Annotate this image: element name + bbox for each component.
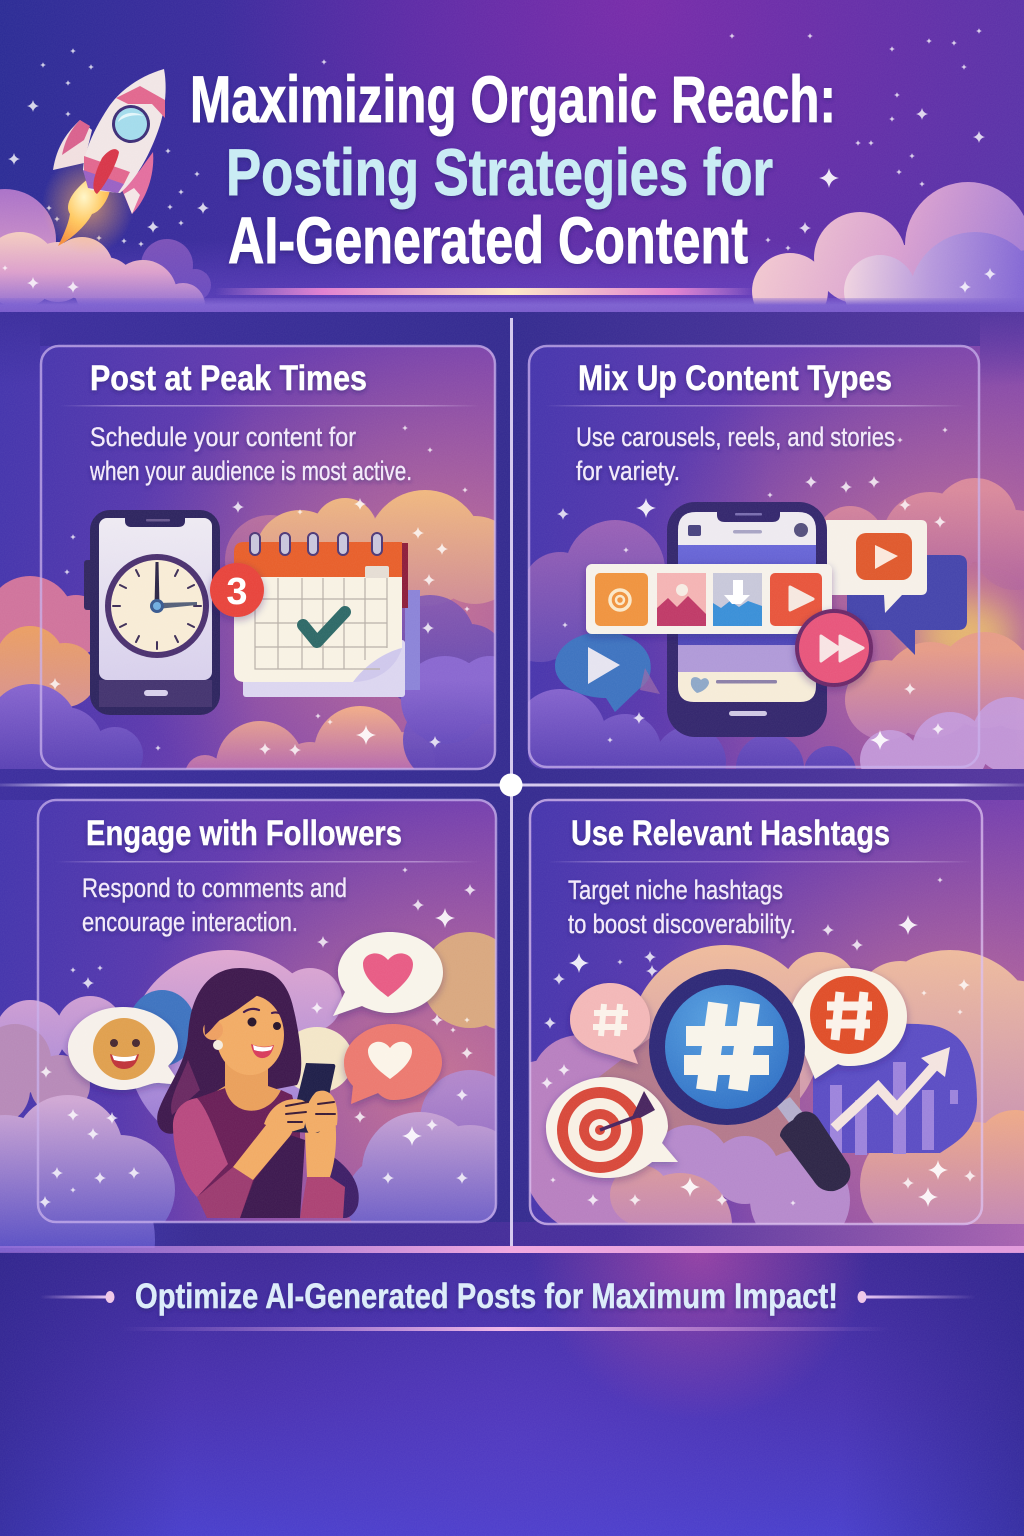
panel 1 stars	[49, 425, 470, 756]
icon: smile bubble	[68, 1007, 181, 1090]
header base strip	[0, 298, 1024, 312]
title	[190, 62, 836, 277]
icon: pink hashtag bubble	[570, 983, 650, 1064]
panel 1 body text: when your audience is most active.	[89, 456, 412, 486]
panel 3 body text: Respond to comments and	[82, 873, 347, 903]
tile: ocean	[713, 573, 762, 626]
panel 4 heading: Use Relevant Hashtags	[571, 814, 890, 853]
calendar rings	[250, 533, 382, 555]
neck and chest	[215, 1060, 285, 1114]
rocket	[42, 69, 166, 255]
face	[216, 995, 284, 1075]
panel 1 body text: Schedule your content for	[90, 422, 356, 452]
center divider cross	[0, 318, 1024, 1250]
header banner	[0, 0, 1024, 312]
fast-forward button	[795, 609, 873, 687]
panel 2 background	[528, 328, 1024, 769]
panel 3 background	[0, 800, 496, 1222]
panel 2 divider	[545, 405, 965, 406]
tile: video	[770, 573, 822, 626]
footer band	[0, 1246, 1024, 1536]
icon: growth chart	[813, 1024, 977, 1155]
icon: blue bubble behind	[128, 990, 196, 1066]
panel 2 stars	[557, 427, 950, 750]
icon: blue speech bubble behind	[847, 555, 967, 655]
panel 3 body text	[82, 873, 347, 937]
panel: engage with followers	[0, 798, 498, 1248]
carousel strip	[586, 564, 832, 634]
sweater	[185, 1088, 300, 1218]
panel 1 body text	[89, 422, 412, 486]
left forearm	[233, 1118, 300, 1180]
panel 3 body text: encourage interaction.	[82, 907, 298, 937]
title: AI-Generated Content	[228, 203, 748, 277]
footer right ornament	[858, 1291, 976, 1303]
fringe	[205, 970, 296, 1035]
icon: woman using phone	[157, 968, 359, 1218]
panel 4 stars	[541, 877, 976, 1207]
left clouds	[0, 189, 211, 304]
header glow line	[215, 288, 755, 295]
panel 3 frame	[38, 800, 496, 1222]
icon: coral heart bubble	[344, 1024, 442, 1104]
panel 2 body text	[576, 422, 895, 486]
trend arrow	[834, 1062, 938, 1128]
icon: red hashtag bubble	[790, 968, 907, 1079]
icon: play speech bubble	[826, 520, 927, 613]
rocket fins	[53, 120, 153, 214]
panel 3 divider	[55, 861, 480, 862]
panel 1 divider	[60, 405, 480, 406]
panel 3 heading: Engage with Followers	[86, 814, 402, 853]
hair	[157, 968, 301, 1134]
tile: photo	[657, 573, 706, 626]
phone in hands	[290, 1063, 335, 1133]
panel 4 background	[530, 800, 1024, 1224]
icon: target bubble	[546, 1077, 678, 1178]
panel 3 stars	[39, 867, 476, 1208]
title: Posting Strategies for	[226, 135, 773, 209]
icon: magnifying glass	[649, 969, 850, 1191]
panel 4 body text: to boost discoverability.	[568, 909, 796, 939]
tile: mention	[595, 573, 648, 626]
rocket body	[83, 69, 166, 193]
right clouds	[752, 182, 1024, 304]
icon: calendar	[234, 533, 420, 697]
icon: smartphone feed	[667, 502, 827, 737]
panel 1 heading: Post at Peak Times	[90, 359, 367, 398]
bottom-left cloud overflow	[0, 1222, 155, 1248]
dart	[600, 1091, 655, 1130]
eyes and brows	[244, 1009, 283, 1030]
icon: cream bubble behind	[281, 1027, 353, 1093]
panel 2 frame	[529, 346, 979, 767]
right sleeve	[300, 1177, 345, 1218]
panel 1 background	[0, 346, 495, 769]
rocket porthole	[112, 105, 150, 143]
panel 2 body text: Use carousels, reels, and stories	[576, 422, 895, 452]
panel 2 body text: for variety.	[576, 456, 680, 486]
hands	[264, 1091, 338, 1135]
panel 1 frame	[41, 346, 495, 769]
notification badge	[210, 563, 264, 617]
panel 4 divider	[548, 861, 973, 862]
clock	[105, 554, 209, 658]
icon: heart bubble	[333, 932, 443, 1016]
notification badge: 3	[226, 571, 248, 613]
mouth	[251, 1044, 274, 1058]
earring	[213, 1040, 223, 1050]
panel: post at peak times	[0, 344, 496, 770]
panel 2 heading: Mix Up Content Types	[578, 359, 892, 398]
header stars	[8, 28, 985, 251]
checkmark	[303, 612, 345, 642]
panel: use relevant hashtags	[528, 798, 1024, 1226]
rocket flame	[58, 176, 110, 246]
icon: phone with clock	[84, 510, 220, 715]
footer message: Optimize AI-Generated Posts for Maximum Impact!	[135, 1277, 838, 1316]
panel 4 frame	[530, 800, 982, 1224]
icon: blue chat bubble	[555, 632, 660, 712]
panel 4 body text: Target niche hashtags	[568, 875, 783, 905]
panel 4 body text	[568, 875, 796, 939]
panel: mix up content types	[528, 328, 1024, 769]
footer left ornament	[40, 1291, 114, 1303]
right forearm	[305, 1118, 336, 1177]
